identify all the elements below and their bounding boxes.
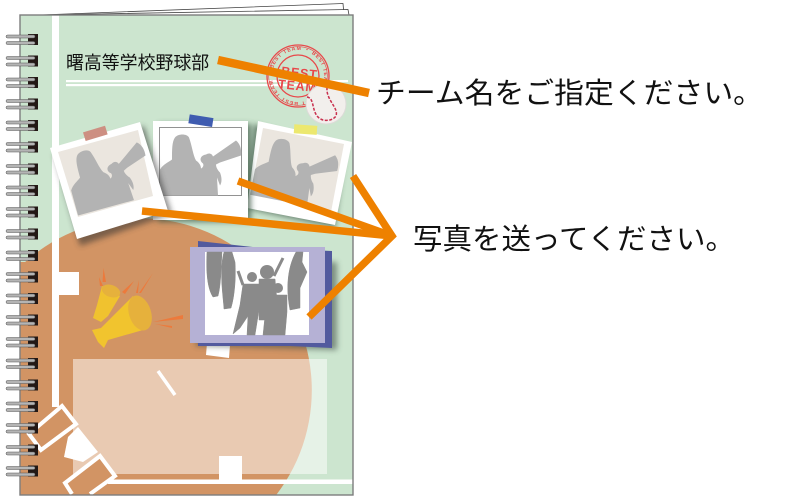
white base left — [58, 272, 79, 295]
photo 4: lilac framed group photo — [190, 241, 337, 350]
title: team name: 曙高等学校野球部 — [66, 53, 209, 73]
stamp: best team: TEAM — [277, 77, 317, 95]
small white tape below lilac photo — [206, 343, 230, 358]
batter box upper — [29, 406, 76, 450]
cover border — [20, 15, 353, 495]
arrow: team name callout line — [218, 60, 369, 93]
notebook back pages — [40, 4, 349, 15]
photo 3: right polaroid — [244, 121, 352, 228]
batter box lower — [65, 456, 115, 494]
label: photo instruction: 写真を送ってください。 — [413, 223, 735, 256]
photo 1: left polaroid — [50, 122, 172, 246]
white dash — [158, 371, 175, 395]
tape: blue — [188, 114, 213, 127]
tape: yellow — [294, 124, 317, 135]
white base bottom — [219, 456, 242, 482]
group silhouettes — [207, 252, 307, 335]
spiral binding rings — [6, 34, 38, 476]
large megaphone — [92, 296, 143, 348]
pale translucent panel — [73, 359, 327, 474]
megaphone icon — [92, 268, 183, 348]
label: team name instruction: チーム名をご指定ください。 — [376, 77, 763, 110]
cover background — [20, 15, 353, 495]
bottom white line — [108, 480, 353, 484]
notebook cover — [20, 15, 353, 495]
orange sparks — [99, 268, 183, 328]
left orange strip — [20, 262, 58, 495]
home plate — [64, 427, 98, 462]
baseball — [306, 84, 346, 124]
photo 2: centre polaroid — [153, 114, 251, 222]
arrows: photo callout lines — [142, 176, 392, 317]
stamp: best team — [266, 44, 330, 108]
vertical white line — [52, 15, 59, 407]
tape: pink — [83, 126, 108, 141]
orange field circle — [20, 218, 312, 495]
title double rule — [66, 80, 348, 86]
stamp: best team: BEST — [281, 64, 318, 82]
small megaphone — [93, 286, 120, 322]
